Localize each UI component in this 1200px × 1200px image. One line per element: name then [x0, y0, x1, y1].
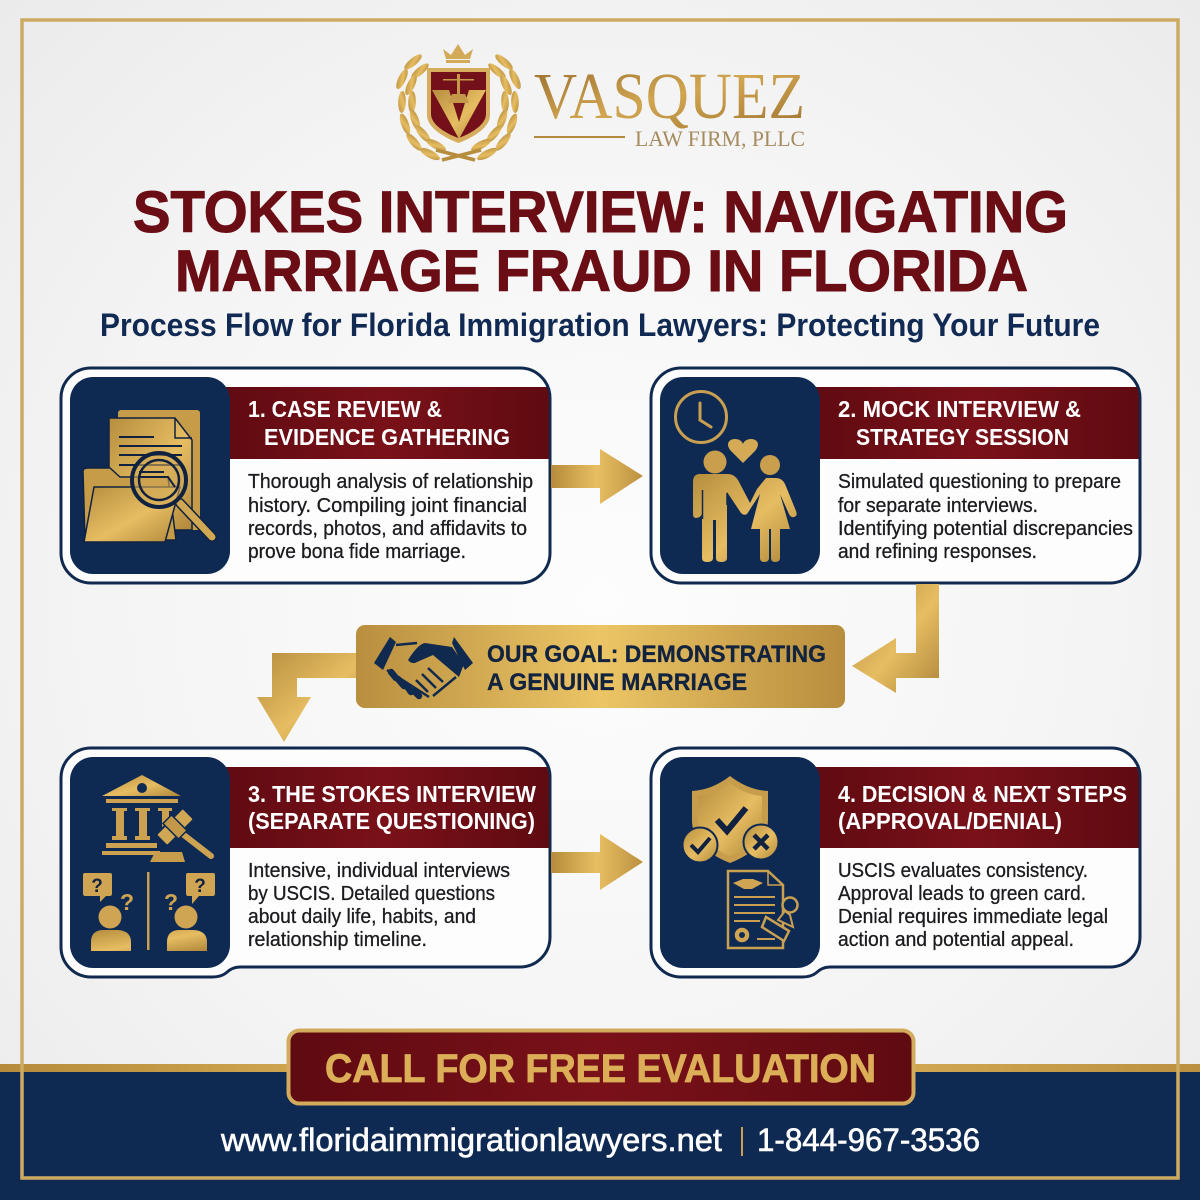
title [133, 180, 1068, 304]
arrow: step 2 to goal [852, 584, 939, 693]
text: step 1: history. Compiling joint financial [248, 494, 527, 517]
text: step 3 [248, 859, 510, 951]
footer band [0, 1064, 1200, 1200]
goal banner [356, 625, 845, 708]
arrow: step 1 to step 2 [551, 449, 643, 504]
navy icon tile: step 3 [70, 757, 230, 968]
arrow: goal to step 3 [257, 653, 360, 742]
heading: step 1 [248, 396, 510, 450]
icon: clock and couple [676, 392, 797, 562]
heading: step 1: 1. CASE REVIEW & [248, 396, 442, 422]
icon: handshake [374, 637, 473, 697]
icon: laurel wreath and shield [394, 44, 523, 163]
icon: courthouse, gavel and separated people: ? [164, 889, 178, 915]
goal text: OUR GOAL: DEMONSTRATING [487, 641, 826, 668]
panel: step 2 [651, 368, 1145, 583]
text: step 1 [248, 470, 533, 563]
goal text: A GENUINE MARRIAGE [487, 669, 747, 696]
heading: step 1: EVIDENCE GATHERING [264, 424, 510, 450]
text: step 1: prove bona fide marriage. [248, 540, 466, 563]
heading: step 3: (SEPARATE QUESTIONING) [248, 808, 535, 834]
call to action badge: CALL FOR FREE EVALUATION [325, 1047, 876, 1091]
heading: step 4: 4. DECISION & NEXT STEPS [838, 781, 1127, 807]
header bar: step 1 [215, 387, 555, 459]
panel: step 4 [651, 748, 1145, 977]
icon: documents, folder and magnifier [83, 410, 212, 542]
header bar: step 4 [805, 767, 1145, 848]
heading: step 3: 3. THE STOKES INTERVIEW [248, 781, 536, 807]
goal text [487, 641, 826, 696]
heading: step 2: STRATEGY SESSION [856, 424, 1069, 450]
call to action badge [288, 1030, 914, 1104]
text: step 4: USCIS evaluates consistency. [838, 859, 1088, 882]
icon: courthouse, gavel and separated people: ? [194, 876, 206, 897]
text: step 2: Identifying potential discrepancies [838, 517, 1133, 540]
text: step 2: and refining responses. [838, 540, 1037, 563]
text: step 2: Simulated questioning to prepare [838, 470, 1121, 493]
text: step 3: Intensive, individual interviews [248, 859, 510, 882]
arrow: step 3 to step 4 [551, 834, 643, 890]
heading: step 4: (APPROVAL/DENIAL) [838, 808, 1062, 834]
text: step 3: by USCIS. Detailed questions [248, 882, 495, 905]
text: step 2: for separate interviews. [838, 494, 1038, 517]
header bar: step 2 [805, 387, 1145, 459]
text: step 2 [838, 470, 1133, 563]
text: step 4: Denial requires immediate legal [838, 905, 1108, 928]
heading: step 4 [838, 781, 1127, 834]
heading: step 2: 2. MOCK INTERVIEW & [838, 396, 1081, 422]
icon: courthouse, gavel and separated people: ? [91, 876, 103, 897]
text: step 3: relationship timeline. [248, 928, 427, 951]
navy icon tile: step 1 [70, 377, 230, 574]
title: MARRIAGE FRAUD IN FLORIDA [175, 239, 1028, 304]
contact line [220, 1122, 980, 1158]
heading: step 2 [838, 396, 1081, 450]
panel: step 3 [61, 748, 555, 977]
text: step 4 [838, 859, 1108, 951]
contact line: www.floridaimmigrationlawyers.net [220, 1122, 722, 1158]
panel: step 1 [61, 368, 555, 583]
subtitle: Process Flow for Florida Immigration Lawyers: Protecting Your Future [100, 307, 1100, 343]
text: step 4: Approval leads to green card. [838, 882, 1086, 905]
navy icon tile: step 2 [660, 377, 820, 574]
logo [394, 44, 805, 163]
tagline: LAW FIRM, PLLC [635, 126, 805, 151]
title: STOKES INTERVIEW: NAVIGATING [133, 180, 1068, 245]
heading: step 3 [248, 781, 536, 834]
icon: courthouse, gavel and separated people: ? [120, 889, 134, 915]
icon: shield, verdict marks, document and stamp [682, 776, 798, 948]
text: step 3: about daily life, habits, and [248, 905, 476, 928]
text: step 1: Thorough analysis of relationship [248, 470, 533, 493]
wordmark: VASQUEZ [534, 60, 805, 133]
icon: courthouse, gavel and separated people [83, 775, 215, 951]
text: step 4: action and potential appeal. [838, 928, 1074, 951]
navy icon tile: step 4 [660, 757, 820, 968]
header bar: step 3 [215, 767, 555, 848]
contact line: 1-844-967-3536 [757, 1122, 980, 1158]
text: step 1: records, photos, and affidavits to [248, 517, 527, 540]
